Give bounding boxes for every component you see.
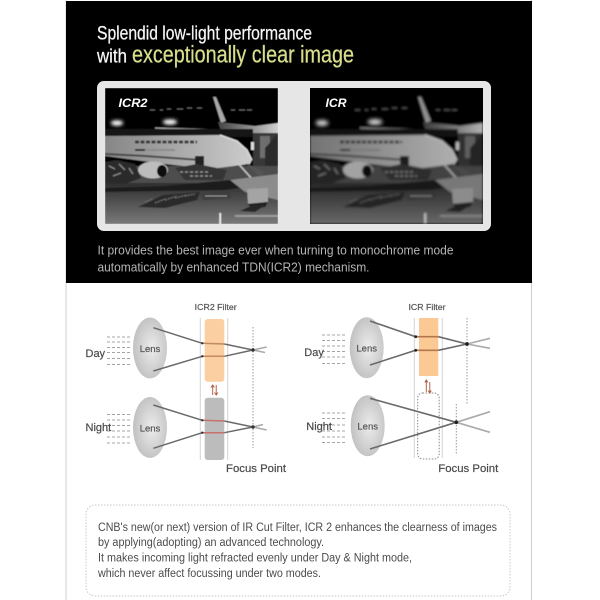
photo comparison frame — [97, 81, 491, 231]
day lens — [133, 318, 167, 378]
incoming light dashes — [322, 335, 345, 442]
callout: explanation box — [86, 505, 510, 596]
diagram: ICR filter — [304, 302, 498, 475]
photo: ICR2 sample: ICR2 — [118, 96, 148, 110]
description text: It provides the best image ever when turning to monochrome mode — [98, 244, 454, 258]
callout text: It makes incoming light refracted evenly under Day & Night mode, — [98, 552, 412, 564]
rays — [153, 328, 267, 448]
callout text: CNB's new(or next) version of IR Cut Filter, ICR 2 enhances the clearness of images — [98, 522, 497, 534]
photo: ICR sample — [310, 88, 483, 224]
label: day: Day — [304, 347, 324, 359]
label: focus point: Focus Point — [226, 463, 286, 475]
focus markers — [201, 342, 255, 434]
heading — [96, 24, 354, 68]
callout text: which never affect focussing under two modes. — [97, 568, 321, 580]
night filter block — [205, 398, 224, 460]
switch arrows — [425, 380, 431, 393]
day lens: Lens — [356, 344, 377, 354]
night lens: Lens — [357, 422, 378, 432]
photo: ICR sample: ICR — [326, 96, 347, 110]
description text — [98, 244, 454, 274]
diagram: ICR2 filter — [86, 302, 286, 475]
day filter block — [205, 319, 224, 382]
day focal plane — [466, 318, 468, 405]
label: night: Night — [306, 421, 332, 433]
day lens: Lens — [140, 344, 161, 355]
rays — [370, 321, 490, 449]
heading: Splendid low-light performance — [97, 24, 312, 44]
filter title: ICR Filter — [408, 302, 446, 312]
callout text: by applying(adopting) an advanced technology. — [98, 537, 324, 549]
label: focus point: Focus Point — [438, 463, 498, 475]
night focal plane — [455, 404, 457, 455]
night lens — [351, 395, 385, 456]
label: night: Night — [86, 422, 111, 434]
page side rules — [66, 0, 532, 600]
heading: exceptionally clear image — [132, 42, 354, 68]
day filter block — [419, 318, 438, 376]
day lens — [350, 317, 384, 378]
heading: with — [96, 46, 127, 68]
filter rails — [200, 318, 228, 460]
callout text — [97, 522, 497, 580]
night lens: Lens — [140, 424, 161, 434]
switch arrows — [211, 385, 218, 395]
focal plane — [252, 327, 254, 448]
incoming light dashes — [107, 337, 130, 443]
panel: dark top section — [66, 1, 532, 283]
filter rails — [414, 318, 442, 458]
label: day: Day — [86, 348, 106, 360]
focus markers — [414, 335, 469, 424]
photo: ICR2 sample — [105, 88, 278, 224]
empty night filter slot — [418, 393, 439, 459]
description text: automatically by enhanced TDN(ICR2) mechanism. — [98, 260, 370, 274]
night lens — [133, 397, 167, 458]
filter title: ICR2 Filter — [195, 302, 237, 312]
